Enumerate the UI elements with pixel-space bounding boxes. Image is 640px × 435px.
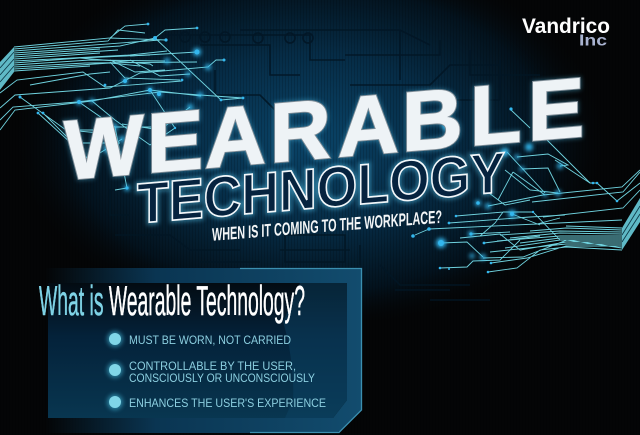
left circuit bundle bbox=[0, 24, 243, 190]
title: TECHNOLOGY: TECHNOLOGY bbox=[137, 141, 505, 236]
panel outer frame bbox=[45, 268, 362, 433]
title: WEARABLE: WEARABLE bbox=[64, 60, 584, 198]
title: WEARABLE: WEARABLE bbox=[64, 60, 584, 198]
title: TECHNOLOGY: TECHNOLOGY bbox=[137, 141, 505, 236]
panel bright edge bbox=[240, 268, 362, 432]
bullet 2: CONTROLLABLE BY THE USER, bbox=[129, 359, 296, 373]
right circuit bundle bbox=[415, 109, 640, 272]
logo: Vandrico Inc: Vandrico bbox=[522, 15, 610, 38]
right upper branch traces bbox=[485, 140, 617, 206]
background circuit board traces bbox=[110, 30, 540, 300]
right bundle fold bbox=[622, 198, 640, 250]
bullet 1: MUST BE WORN, NOT CARRIED bbox=[129, 333, 291, 347]
subtitle: WHEN IS IT COMING TO THE WORKPLACE? bbox=[212, 207, 442, 245]
bullet 3: ENHANCES THE USER'S EXPERIENCE bbox=[129, 396, 326, 410]
bullet 2: CONSCIOUSLY OR UNCONSCIOUSLY bbox=[129, 371, 315, 385]
bullet 1 bbox=[107, 331, 291, 347]
right circuit glow nodes bbox=[411, 107, 618, 273]
panel: what is wearable technology bbox=[39, 268, 362, 433]
logo: Vandrico Inc bbox=[522, 15, 610, 50]
left bundle fold bbox=[0, 47, 14, 90]
title: WEARABLE: WEARABLE bbox=[64, 60, 584, 198]
bullet 2 bbox=[107, 359, 315, 385]
panel inner highlight bbox=[283, 283, 347, 418]
logo: Vandrico Inc: Inc bbox=[579, 32, 607, 50]
panel inner bbox=[48, 283, 347, 418]
left circuit glow nodes bbox=[18, 23, 244, 191]
heading: What is Wearable Technology? bbox=[39, 277, 305, 324]
